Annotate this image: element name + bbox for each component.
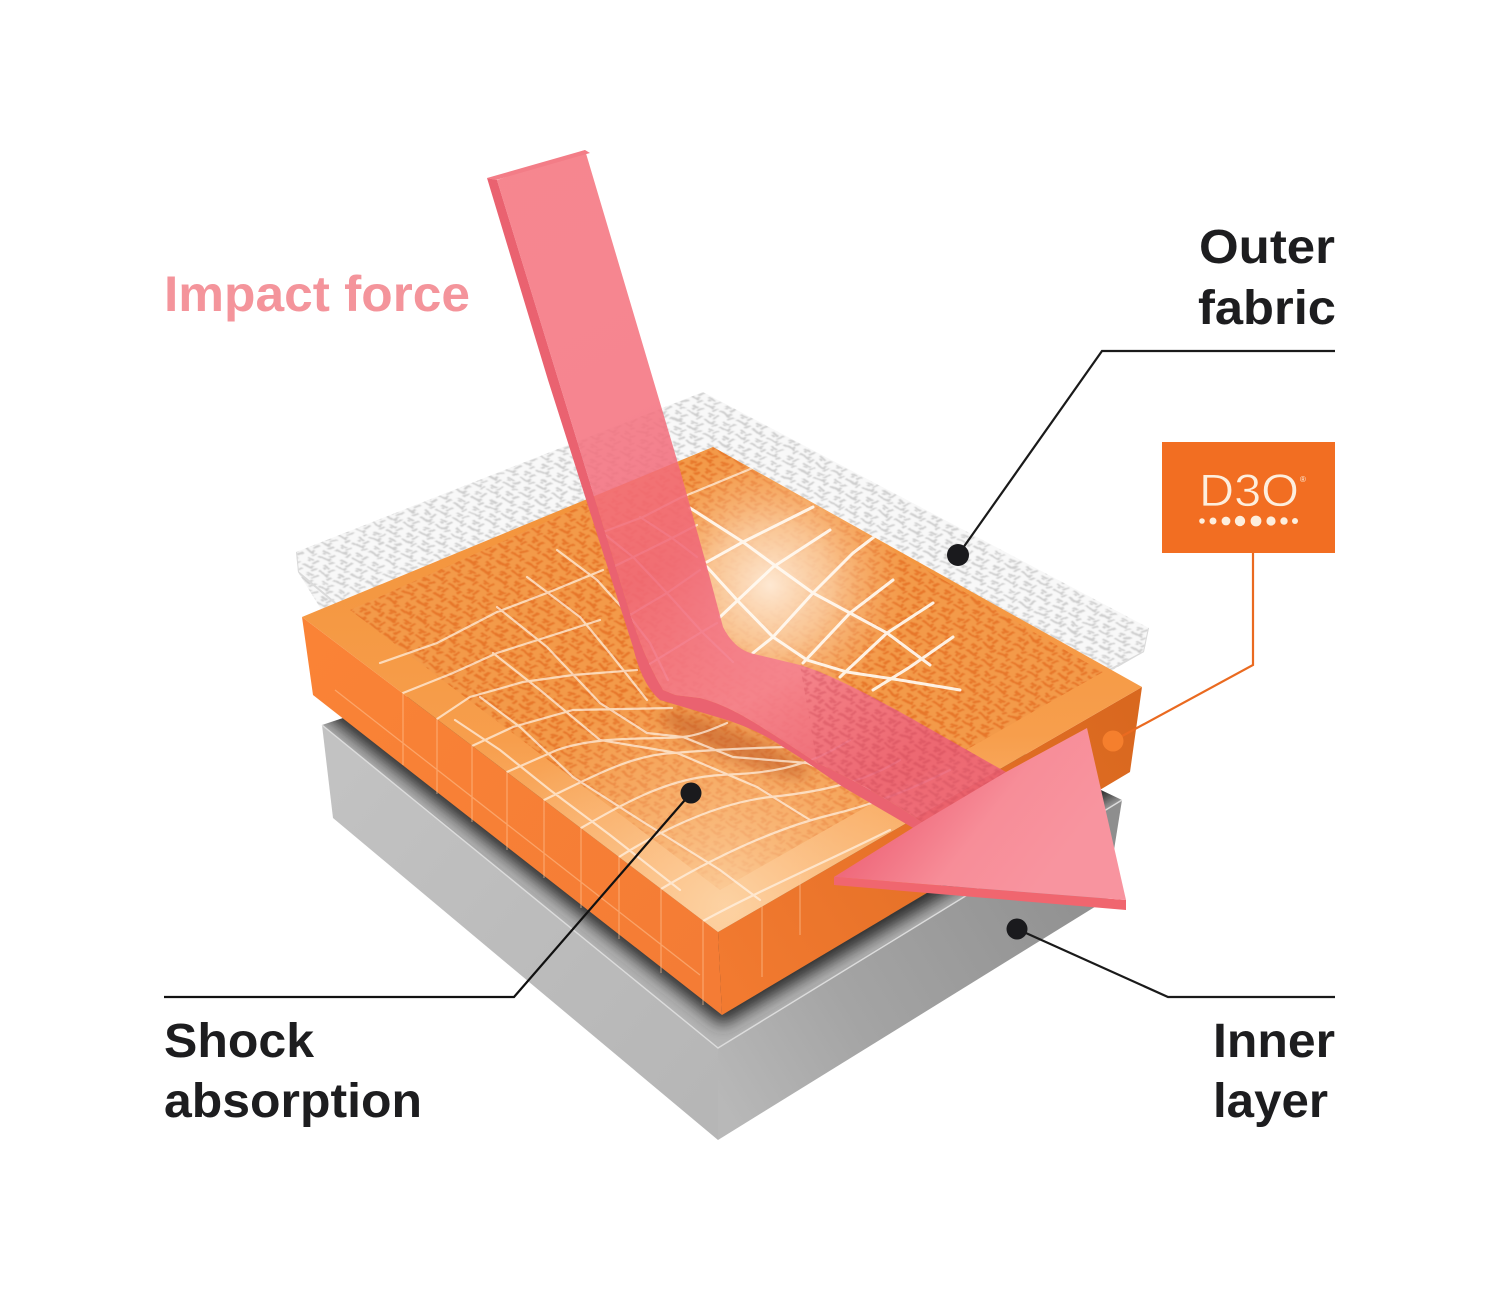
D3O logo badge: ® (1300, 475, 1306, 484)
label: Inner layer (1213, 1015, 1335, 1128)
label: Shock absorption: absorption (164, 1075, 422, 1128)
impact force arrow (487, 150, 1126, 910)
arrow head underside thickness (834, 877, 1126, 910)
leader: D3O (1102, 553, 1253, 752)
label: Shock absorption (164, 1015, 422, 1128)
D3O logo badge: D3O (1199, 465, 1299, 516)
label: Inner layer: layer (1213, 1075, 1328, 1128)
warped grid lines in shock layer (380, 465, 960, 921)
label: Outer fabric: Outer (1199, 221, 1335, 274)
label: Outer fabric: fabric (1198, 282, 1336, 335)
arrow bent band (497, 150, 1006, 822)
D3O logo badge (1162, 442, 1335, 553)
arrow head (834, 728, 1126, 900)
orange shock-absorbing block (302, 440, 1142, 1015)
leader: shock absorption (164, 782, 702, 997)
label: Impact force: Impact force (164, 266, 470, 322)
outer fabric layer sheet (296, 392, 1149, 670)
grey inner layer block (322, 696, 1122, 1140)
arrow side edge (487, 178, 925, 835)
weave showing through arrow band (800, 660, 1010, 825)
leader: inner layer (1006, 918, 1335, 997)
leader: outer fabric (947, 351, 1335, 566)
label: Shock absorption: Shock (164, 1015, 314, 1068)
arrow top end cap (487, 150, 590, 180)
label: Inner layer: Inner (1213, 1015, 1335, 1068)
label: Outer fabric (1198, 221, 1336, 335)
illustration: layered material stack (290, 150, 1155, 1140)
